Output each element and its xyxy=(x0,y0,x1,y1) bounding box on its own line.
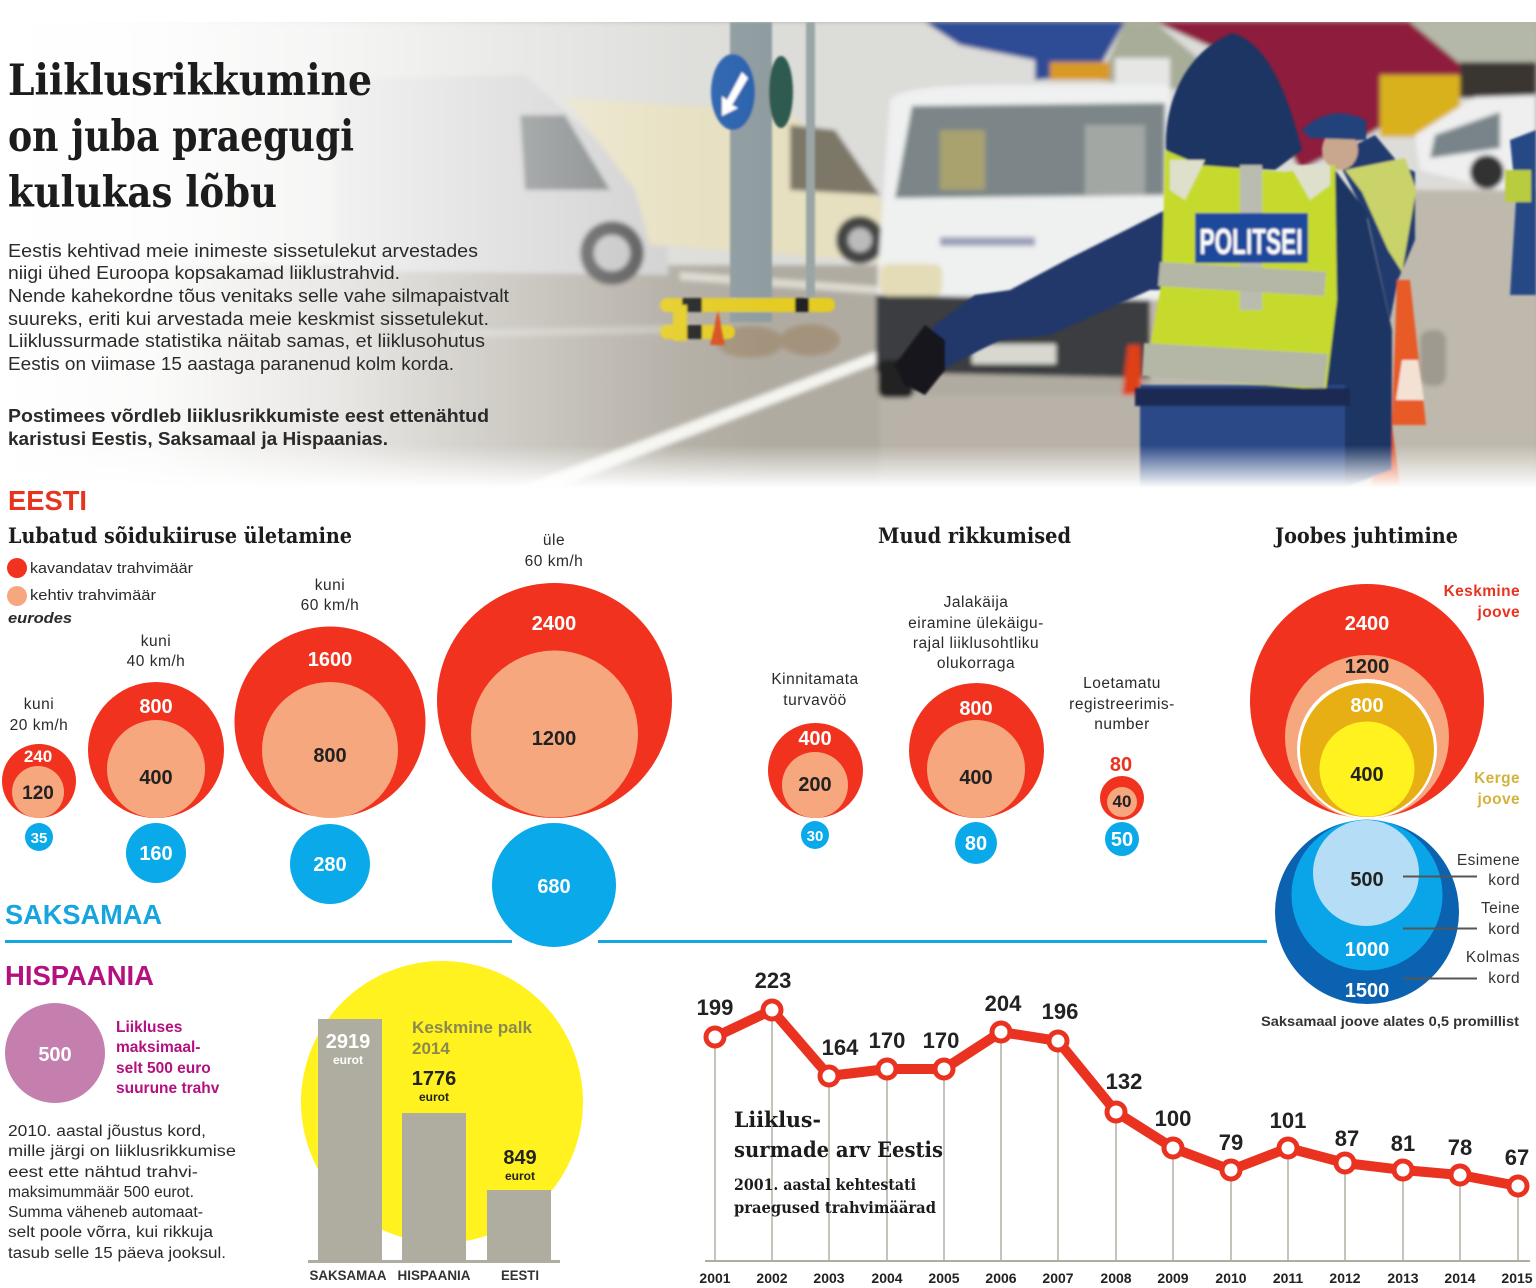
line chart: road deaths in Estonia: 2003 xyxy=(813,1270,845,1286)
legend: kehtiv trahvimäär xyxy=(30,587,156,604)
line chart: road deaths in Estonia: 170 xyxy=(923,1028,959,1053)
bubble group: up to 20 km/h: kuni xyxy=(24,696,54,713)
bubble group: pedestrian crossing: Jalakäija xyxy=(944,594,1008,611)
drunk driving fines: Estonia: 2400 xyxy=(1345,613,1389,635)
line chart: road deaths in Estonia: 87 xyxy=(1335,1126,1359,1151)
bubble group: seatbelt: 400 xyxy=(798,728,832,750)
line chart: road deaths in Estonia: 101 xyxy=(1270,1108,1306,1133)
legend: kavandatav trahvimäär xyxy=(30,560,193,577)
bubble group: up to 60 km/h: 1600 xyxy=(308,649,352,671)
bubble group: pedestrian crossing: rajal liiklusohtliku xyxy=(913,635,1039,652)
intro text xyxy=(8,241,509,374)
line chart: road deaths in Estonia: 81 xyxy=(1391,1131,1415,1156)
bar chart: average salary 2014: 2919 xyxy=(326,1031,370,1053)
intro bold text: karistusi Eestis, Saksamaal ja Hispaanias. xyxy=(8,429,388,449)
drunk driving fines: Germany: 500 xyxy=(1350,869,1384,891)
drunk driving fines: Germany: kord xyxy=(1488,921,1520,938)
heading: other offences: Muud rikkumised xyxy=(878,523,1071,548)
intro text: niigi ühed Euroopa kopsakamad liiklustrahvid. xyxy=(8,263,400,283)
bubble group: up to 20 km/h xyxy=(2,696,76,851)
drunk driving fines: Germany: 1500 xyxy=(1345,980,1389,1002)
bubble group: seatbelt: 30 xyxy=(807,828,823,845)
line chart: road deaths in Estonia: 2005 xyxy=(928,1270,960,1286)
bubble group: up to 20 km/h: 35 xyxy=(31,830,47,847)
bubble group: up to 60 km/h xyxy=(234,577,426,904)
line chart: road deaths in Estonia: 204 xyxy=(985,991,1022,1016)
heading: speeding: Lubatud sõidukiiruse ületamine xyxy=(8,523,352,548)
intro bold text xyxy=(8,406,489,449)
line chart: road deaths in Estonia: 132 xyxy=(1106,1069,1142,1094)
line chart: road deaths in Estonia: 2015 xyxy=(1501,1270,1533,1286)
bubble group: up to 40 km/h: 800 xyxy=(139,696,173,718)
bubble group: seatbelt: 200 xyxy=(798,774,832,796)
bubble group: over 60 km/h: 680 xyxy=(537,876,571,898)
line chart: road deaths in Estonia: 2009 xyxy=(1157,1270,1189,1286)
line chart: road deaths in Estonia: 2008 xyxy=(1100,1270,1132,1286)
drunk driving fines: Estonia: 400 xyxy=(1350,764,1384,786)
Spain text block: Summa väheneb automaat- xyxy=(8,1204,203,1221)
line chart: road deaths in Estonia: 199 xyxy=(697,995,733,1020)
title xyxy=(8,56,372,218)
intro text: Eestis on viimase 15 aastaga paranenud kolm korda. xyxy=(8,354,454,374)
bubble group: illegible plate: registreerimis- xyxy=(1069,696,1175,713)
line chart title: 2001. aastal kehtestati xyxy=(734,1175,916,1194)
title: Liiklusrikkumine xyxy=(8,56,372,106)
drunk driving fines: Germany: kord xyxy=(1488,970,1520,987)
line chart title: praegused trahvimäärad xyxy=(734,1198,936,1217)
intro text: Eestis kehtivad meie inimeste sissetulekut arvestades xyxy=(8,241,478,261)
bubble group: up to 20 km/h: 20 km/h xyxy=(10,717,68,734)
line chart: road deaths in Estonia: 164 xyxy=(822,1035,859,1060)
line chart title xyxy=(734,1107,943,1217)
bar chart: average salary 2014: 2014 xyxy=(412,1039,450,1058)
bubble group: illegible plate: 50 xyxy=(1111,829,1133,851)
line chart: road deaths in Estonia: 2006 xyxy=(985,1270,1017,1286)
bubble group: over 60 km/h xyxy=(437,532,672,947)
bubble group: pedestrian crossing: eiramine ülekäigu- xyxy=(908,615,1044,632)
line chart: road deaths in Estonia: 170 xyxy=(869,1028,905,1053)
bubble group: up to 20 km/h: 240 xyxy=(24,747,52,766)
drunk driving fines: Germany: Esimene xyxy=(1457,852,1520,869)
bubble group: illegible plate: Loetamatu xyxy=(1083,675,1161,692)
Spain text block: tasub selle 15 päeva jooksul. xyxy=(8,1245,226,1262)
Spain text block: mille järgi on liiklusrikkumise xyxy=(8,1143,236,1160)
bubble group: illegible plate: 40 xyxy=(1113,792,1131,811)
bar chart: average salary 2014: eurot xyxy=(419,1090,449,1104)
Spain text block: selt poole võrra, kui rikkuja xyxy=(8,1224,213,1241)
heading: Eesti: EESTI xyxy=(8,485,87,516)
line chart: road deaths in Estonia: 196 xyxy=(1042,999,1078,1024)
photo: police officer stopping a van: POLITSEI xyxy=(1200,221,1302,262)
Spain fine caption xyxy=(116,1019,220,1097)
line chart: road deaths in Estonia: 2001 xyxy=(699,1270,731,1286)
bubble group: over 60 km/h: 60 km/h xyxy=(525,553,583,570)
drunk driving fines: Estonia: 1200 xyxy=(1345,656,1389,678)
bar chart: average salary 2014: Keskmine palk xyxy=(412,1018,533,1037)
drunk driving fines: Germany xyxy=(1261,820,1520,1029)
intro text: Liiklussurmade statistika näitab samas, et liiklusohutus xyxy=(8,331,485,351)
bubble group: over 60 km/h: 2400 xyxy=(532,613,576,635)
drunk driving fines: Germany: Kolmas xyxy=(1466,949,1520,966)
legend: eurodes xyxy=(8,610,72,627)
Germany divider line xyxy=(5,940,1267,943)
bar chart: average salary 2014: 849 xyxy=(503,1147,537,1169)
drunk driving fines: Estonia: 800 xyxy=(1350,695,1384,717)
bar chart: average salary 2014: 1776 xyxy=(412,1068,456,1090)
drunk driving fines: Estonia: joove xyxy=(1477,791,1520,808)
line chart: road deaths in Estonia xyxy=(697,968,1533,1286)
intro text: suureks, eriti kui arvestada meie keskmist sissetulekut. xyxy=(8,309,489,329)
bubble group: seatbelt: Kinnitamata xyxy=(771,671,859,688)
bar chart: average salary 2014: EESTI xyxy=(501,1267,539,1283)
bubble group: up to 60 km/h: 800 xyxy=(313,745,347,767)
bubble group: seatbelt xyxy=(768,671,863,849)
bubble group: up to 40 km/h: 160 xyxy=(139,843,173,865)
bar chart: average salary 2014: eurot xyxy=(505,1169,535,1183)
bubble group: seatbelt: turvavöö xyxy=(783,692,847,709)
intro text: Nende kahekordne tõus venitaks selle vahe silmapaistvalt xyxy=(8,286,509,306)
line chart: road deaths in Estonia: 2004 xyxy=(871,1270,903,1286)
drunk driving fines: Germany: 1000 xyxy=(1345,939,1389,961)
Spain text block: 2010. aastal jõustus kord, xyxy=(8,1123,206,1140)
line chart title: surmade arv Eestis xyxy=(734,1137,943,1162)
bubble group: up to 40 km/h: 400 xyxy=(139,767,173,789)
drunk driving fines: Germany: kord xyxy=(1488,872,1520,889)
intro bold text: Postimees võrdleb liiklusrikkumiste eest ettenähtud xyxy=(8,406,489,426)
title: on juba praegugi xyxy=(8,112,354,162)
Spain text block xyxy=(8,1123,236,1262)
line chart: road deaths in Estonia: 2007 xyxy=(1042,1270,1074,1286)
drunk driving fines: Estonia: joove xyxy=(1477,604,1520,621)
Spain text block: maksimummäär 500 eurot. xyxy=(8,1184,194,1201)
drunk driving fines: Estonia: Kerge xyxy=(1474,770,1520,787)
line chart: road deaths in Estonia: 2010 xyxy=(1215,1270,1247,1286)
bubble group: over 60 km/h: üle xyxy=(543,532,565,549)
bubble group: up to 20 km/h: 120 xyxy=(22,783,54,804)
title: kulukas lõbu xyxy=(8,168,277,218)
bubble group: pedestrian crossing: 800 xyxy=(959,698,993,720)
bar chart: average salary 2014 xyxy=(301,961,583,1283)
line chart: road deaths in Estonia: 67 xyxy=(1505,1145,1529,1170)
Spain fine caption: Liikluses xyxy=(116,1019,182,1036)
bubble group: over 60 km/h: 1200 xyxy=(532,728,576,750)
bubble group: illegible plate xyxy=(1069,675,1175,856)
bubble group: up to 40 km/h: 40 km/h xyxy=(127,653,185,670)
bubble group: up to 60 km/h: kuni xyxy=(315,577,345,594)
Spain fine caption: suurune trahv xyxy=(116,1080,220,1097)
bubble group: pedestrian crossing: olukorraga xyxy=(937,655,1015,672)
line chart: road deaths in Estonia: 223 xyxy=(755,968,791,993)
Spain fine caption: selt 500 euro xyxy=(116,1060,211,1077)
line chart: road deaths in Estonia: 78 xyxy=(1448,1135,1472,1160)
line chart title: Liiklus- xyxy=(734,1107,821,1132)
line chart: road deaths in Estonia: 2012 xyxy=(1329,1270,1361,1286)
bubble group: illegible plate: 80 xyxy=(1110,754,1132,776)
Spain fine circle: 500 xyxy=(38,1044,72,1066)
bubble group: up to 40 km/h xyxy=(88,633,224,883)
legend xyxy=(7,558,193,627)
drunk driving fines: Estonia xyxy=(1250,583,1520,819)
drunk driving fines: Germany: Teine xyxy=(1481,900,1520,917)
bubble group: pedestrian crossing xyxy=(908,594,1044,864)
bar chart: average salary 2014: HISPAANIA xyxy=(398,1267,470,1283)
Spain fine caption: maksimaal- xyxy=(116,1039,200,1056)
bubble group: up to 40 km/h: kuni xyxy=(141,633,171,650)
bubble group: up to 60 km/h: 280 xyxy=(313,854,347,876)
bubble group: illegible plate: number xyxy=(1094,716,1150,733)
bubble group: pedestrian crossing: 400 xyxy=(959,767,993,789)
line chart: road deaths in Estonia: 2011 xyxy=(1273,1270,1303,1286)
heading: drunk driving: Joobes juhtimine xyxy=(1273,523,1458,548)
Spain fine circle xyxy=(5,1003,105,1103)
line chart: road deaths in Estonia: 2014 xyxy=(1444,1270,1476,1286)
heading: Hispaania: HISPAANIA xyxy=(5,960,154,991)
bubble group: pedestrian crossing: 80 xyxy=(965,833,987,855)
line chart: road deaths in Estonia: 2013 xyxy=(1387,1270,1419,1286)
line chart: road deaths in Estonia: 100 xyxy=(1155,1106,1191,1131)
Spain text block: eest ette nähtud trahvi- xyxy=(8,1164,198,1181)
bar chart: average salary 2014: eurot xyxy=(333,1053,363,1067)
drunk driving fines: Estonia: Keskmine xyxy=(1444,583,1520,600)
line chart: road deaths in Estonia: 2002 xyxy=(756,1270,788,1286)
line chart: road deaths in Estonia: 79 xyxy=(1219,1130,1243,1155)
heading: Saksamaa: SAKSAMAA xyxy=(5,899,162,930)
photo: police officer stopping a van xyxy=(183,22,1536,486)
bar chart: average salary 2014: SAKSAMAA xyxy=(310,1267,386,1283)
bubble group: up to 60 km/h: 60 km/h xyxy=(301,597,359,614)
drunk driving fines: Germany: Saksamaal joove alates 0,5 promillist xyxy=(1261,1013,1519,1029)
